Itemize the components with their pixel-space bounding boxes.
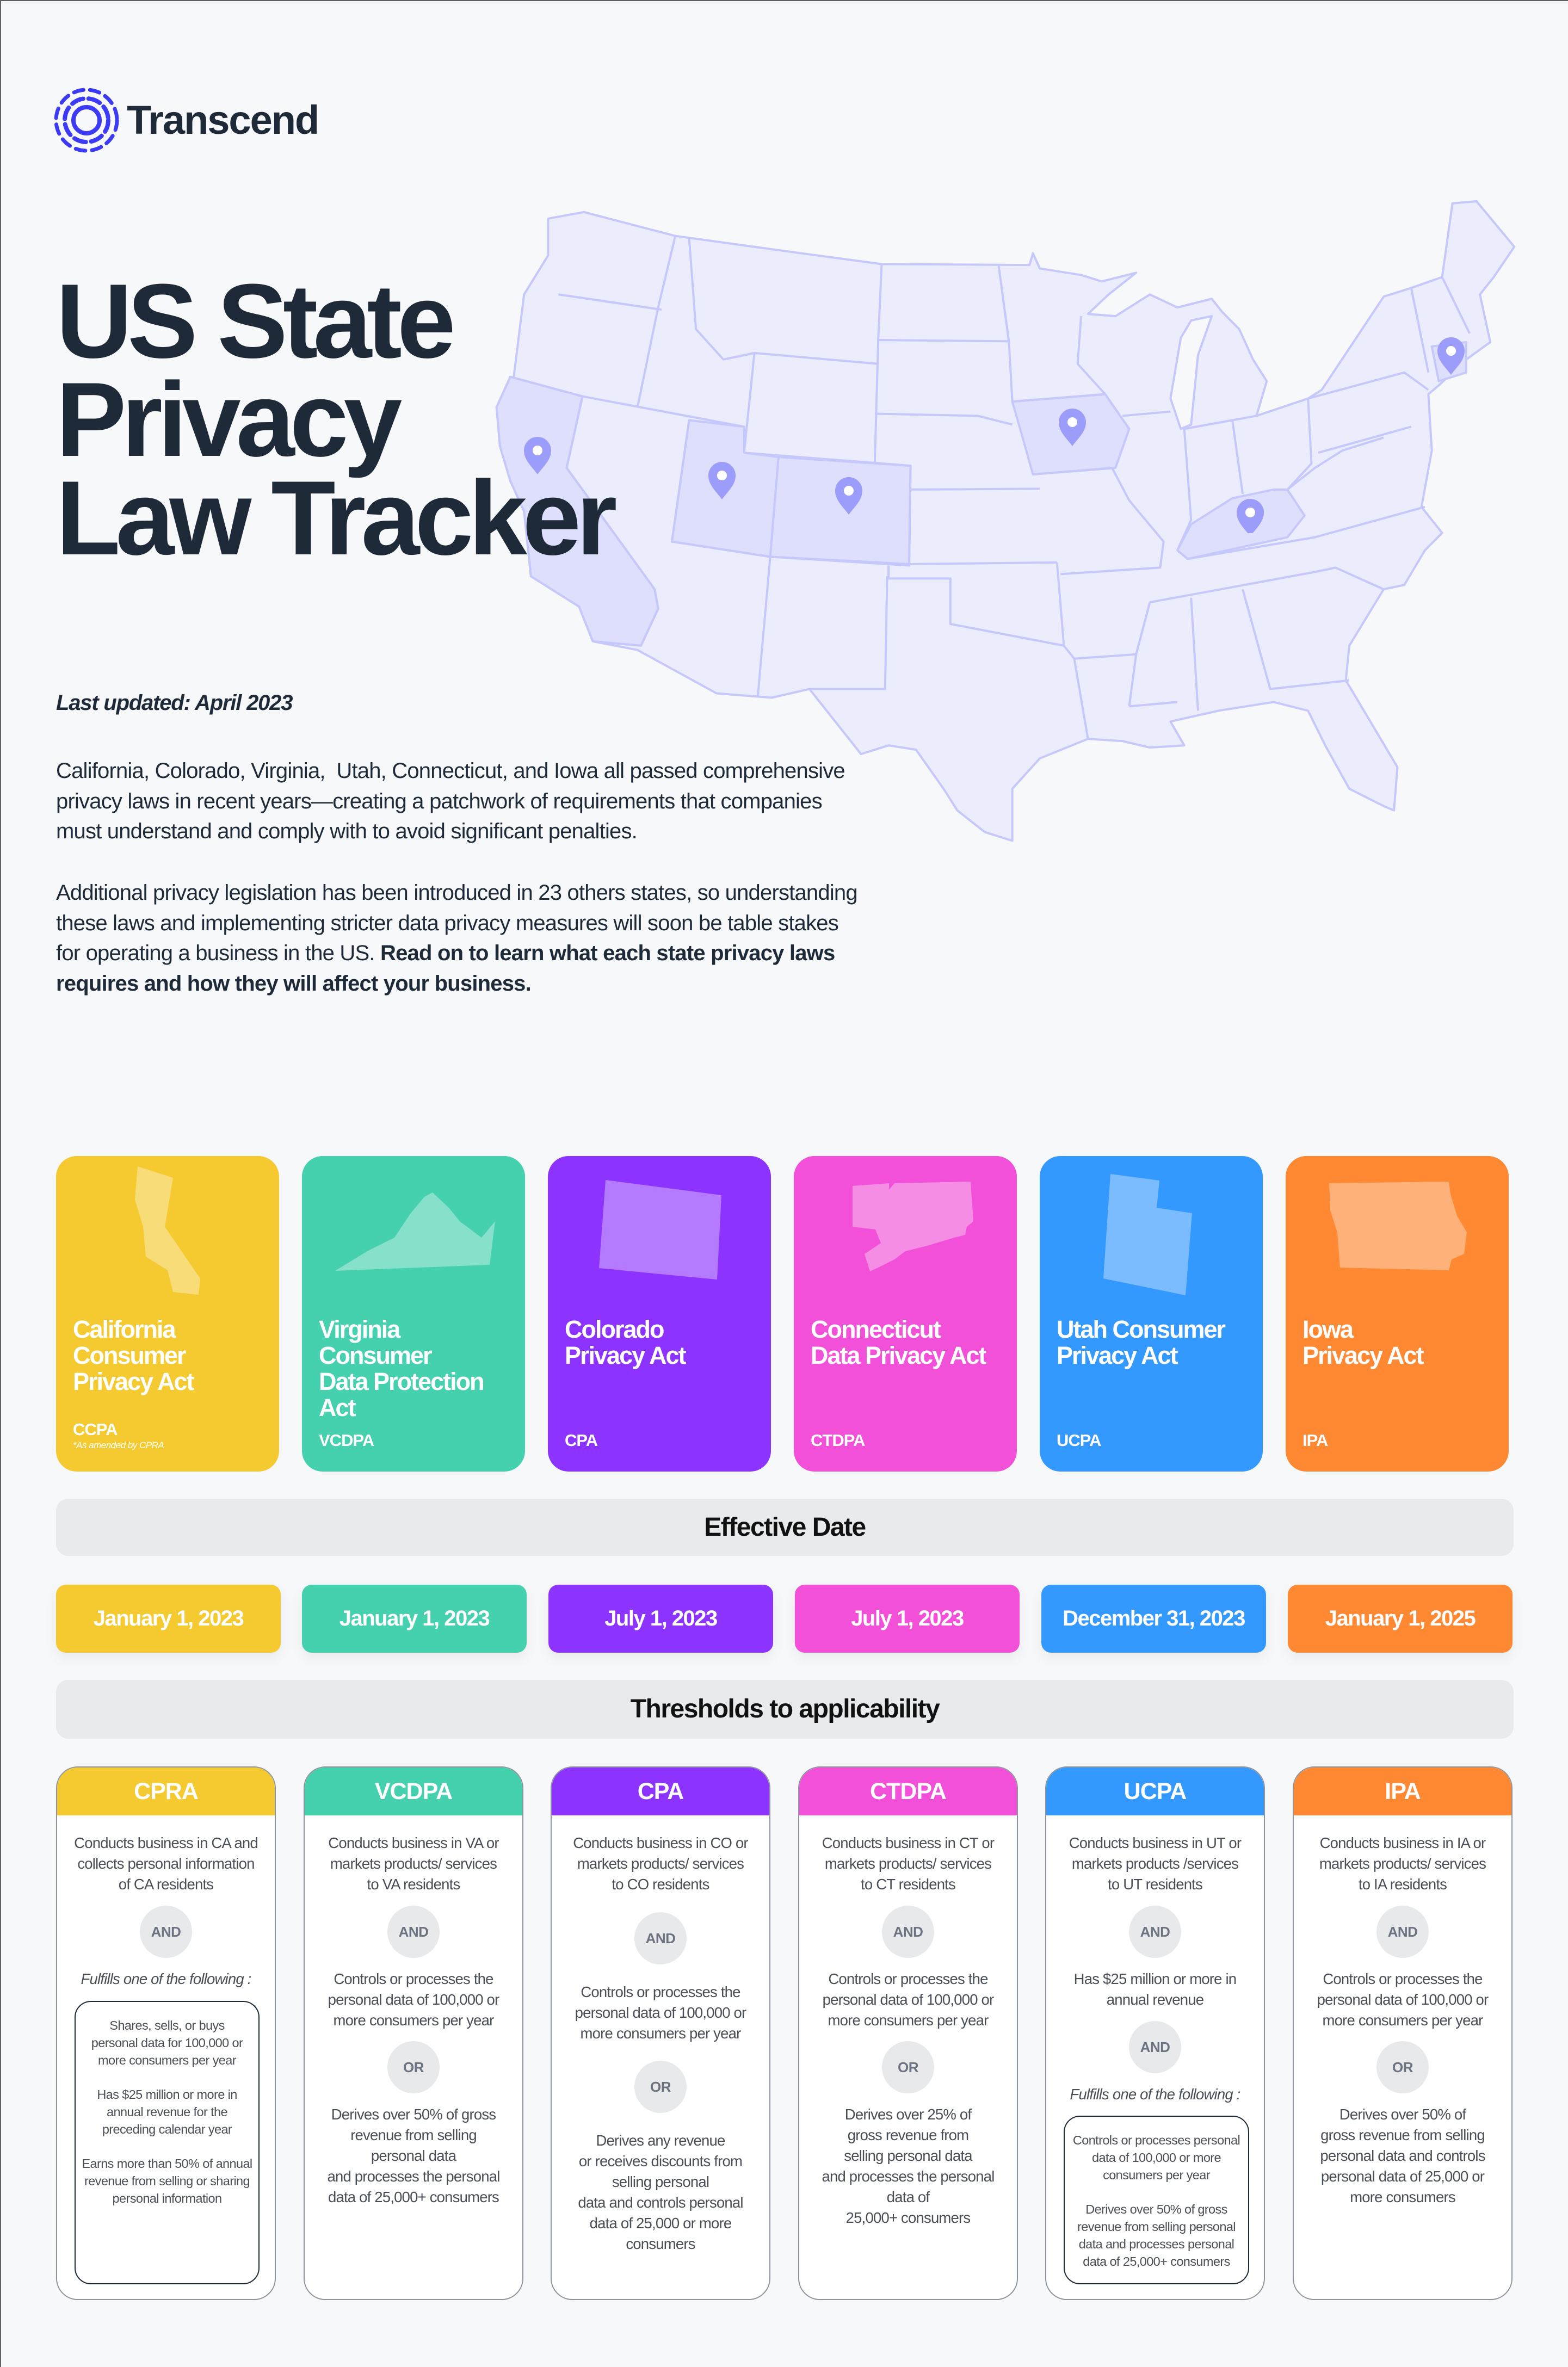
state card: California: CCPA xyxy=(73,1420,118,1439)
threshold card: UCPA: annual revenue xyxy=(1107,1991,1203,2008)
threshold card: IPA: personal data of 100,000 or xyxy=(1317,1991,1488,2008)
threshold card: CPA: more consumers per year xyxy=(581,2025,740,2042)
threshold card: IPA: Conducts business in IA or xyxy=(1320,1834,1485,1851)
threshold card: CTDPA: Derives over 25% of xyxy=(845,2106,971,2123)
threshold card: CPRA: personal information xyxy=(113,2191,221,2205)
threshold card: CTDPA xyxy=(798,1766,1018,2300)
threshold card: CPA: personal data of 100,000 or xyxy=(575,2004,746,2021)
threshold card: VCDPA: more consumers per year xyxy=(334,2012,493,2029)
threshold card: UCPA: Controls or processes personal xyxy=(1073,2133,1240,2147)
icon: map pins xyxy=(524,337,1465,533)
paragraph: additional legislation: Additional privacy legislation has been introduced in 23 others states, so understanding xyxy=(56,881,857,905)
state card: Iowa: IPA xyxy=(1302,1431,1328,1450)
threshold card: IPA: AND xyxy=(1388,1924,1417,1940)
threshold card: CPRA: preceding calendar year xyxy=(102,2122,232,2136)
state card: Utah: UCPA xyxy=(1057,1431,1101,1450)
threshold card: CPA: markets products/ services xyxy=(577,1855,744,1872)
title: Law Tracker xyxy=(56,459,613,577)
threshold card: CPA: Conducts business in CO or xyxy=(573,1834,748,1851)
threshold card: IPA: markets products/ services xyxy=(1319,1855,1486,1872)
threshold card: CPRA: more consumers per year xyxy=(98,2053,236,2067)
threshold card: IPA: Controls or processes the xyxy=(1323,1970,1483,1987)
icon: concentric dashed rings xyxy=(54,88,119,152)
date pill: CTDPA xyxy=(795,1585,1020,1653)
threshold card: UCPA: to UT residents xyxy=(1108,1876,1202,1893)
state card: California: California xyxy=(73,1315,175,1343)
state card: Colorado: Privacy Act xyxy=(565,1342,685,1369)
state card: California xyxy=(56,1156,279,1472)
threshold card: UCPA: data of 100,000 or more xyxy=(1092,2150,1221,2165)
last updated: Last updated: April 2023 xyxy=(56,691,292,715)
heading: Effective Date xyxy=(56,1499,1514,1556)
threshold card: CPA: data of 25,000 or more xyxy=(590,2215,731,2232)
state card: California: *As amended by CPRA xyxy=(73,1440,164,1450)
threshold card: UCPA: Fulfills one of the following : xyxy=(1070,2086,1240,2103)
paragraph: intro: must understand and comply with to avoid significant penalties. xyxy=(56,819,637,843)
date pill: CCPA xyxy=(56,1585,281,1653)
threshold card: UCPA: Conducts business in UT or xyxy=(1069,1834,1241,1851)
threshold card: IPA: IPA xyxy=(1385,1778,1421,1804)
state card: Virginia: Act xyxy=(319,1394,355,1422)
threshold card: IPA xyxy=(1293,1766,1513,2300)
threshold card: CPA: Controls or processes the xyxy=(581,1983,740,2000)
threshold card: CTDPA: to CT residents xyxy=(861,1876,955,1893)
threshold card: CPRA: Has $25 million or more in xyxy=(97,2087,237,2102)
threshold card: UCPA: AND xyxy=(1140,1924,1170,1940)
threshold card: VCDPA: data of 25,000+ consumers xyxy=(328,2189,499,2205)
threshold card: VCDPA xyxy=(304,1766,523,2300)
state card: Virginia: Data Protection xyxy=(319,1368,484,1395)
date pill: UCPA: December 31, 2023 xyxy=(1063,1606,1245,1630)
threshold card: UCPA: Has $25 million or more in xyxy=(1074,1970,1236,1987)
state card: Colorado: Colorado xyxy=(565,1315,664,1343)
threshold card: CPRA xyxy=(56,1766,276,2300)
paragraph: intro: California, Colorado, Virginia, Utah, Connecticut, and Iowa all passed comprehensive xyxy=(56,759,845,783)
title: Privacy xyxy=(56,361,397,479)
state card: California: Privacy Act xyxy=(73,1368,193,1395)
threshold card: CTDPA: AND xyxy=(893,1924,923,1940)
threshold card: CTDPA: selling personal data xyxy=(844,2147,972,2164)
state card: Iowa xyxy=(1286,1156,1509,1472)
threshold card: UCPA: consumers per year xyxy=(1103,2168,1210,2182)
title xyxy=(56,262,616,577)
threshold card: VCDPA: markets products/ services xyxy=(330,1855,497,1872)
date pill: CPA: July 1, 2023 xyxy=(604,1606,717,1630)
threshold card: CPA: Derives any revenue xyxy=(596,2132,725,2149)
threshold card: UCPA: Derives over 50% of gross xyxy=(1085,2202,1227,2216)
date pill: IPA: January 1, 2025 xyxy=(1325,1606,1475,1630)
threshold card: CPRA: Conducts business in CA and xyxy=(74,1834,258,1851)
date pill: VCDPA xyxy=(302,1585,527,1653)
threshold card: CTDPA: and processes the personal xyxy=(822,2168,995,2185)
threshold card: CTDPA: Controls or processes the xyxy=(828,1970,988,1987)
threshold card: CPRA: Earns more than 50% of annual xyxy=(82,2156,252,2171)
state card: California: Consumer xyxy=(73,1342,186,1369)
threshold card: VCDPA: Conducts business in VA or xyxy=(328,1834,499,1851)
threshold card: CPRA: annual revenue for the xyxy=(107,2105,227,2119)
threshold card: VCDPA: Controls or processes the xyxy=(334,1970,493,1987)
threshold card: UCPA: UCPA xyxy=(1124,1778,1186,1804)
threshold card: CPA: data and controls personal xyxy=(578,2194,743,2211)
threshold card: CTDPA: gross revenue from xyxy=(848,2127,968,2143)
threshold card: UCPA: AND xyxy=(1140,2039,1170,2055)
threshold card: UCPA: markets products /services xyxy=(1072,1855,1238,1872)
threshold card: CPRA: Shares, sells, or buys xyxy=(109,2018,225,2032)
threshold card: CTDPA: personal data of 100,000 or xyxy=(823,1991,993,2008)
threshold card: CPA xyxy=(551,1766,770,2300)
map of US states xyxy=(495,200,1516,842)
state card: Utah: Utah Consumer xyxy=(1057,1315,1225,1343)
threshold card: CTDPA: 25,000+ consumers xyxy=(846,2209,970,2226)
date pill: VCDPA: January 1, 2023 xyxy=(339,1606,489,1630)
threshold card: CPRA: of CA residents xyxy=(119,1876,213,1893)
threshold card: VCDPA: AND xyxy=(399,1924,428,1940)
threshold card: CPRA: AND xyxy=(151,1924,181,1940)
threshold card: IPA: OR xyxy=(1392,2059,1413,2075)
paragraph: intro xyxy=(56,759,845,843)
threshold card: CPA: or receives discounts from xyxy=(579,2153,742,2170)
threshold card: IPA: more consumers xyxy=(1350,2189,1455,2205)
threshold card: UCPA: revenue from selling personal xyxy=(1077,2220,1236,2234)
threshold card: CPA: AND xyxy=(646,1930,675,1946)
state card: Virginia xyxy=(302,1156,525,1472)
threshold card: VCDPA: OR xyxy=(403,2059,424,2075)
date pill: IPA xyxy=(1288,1585,1513,1653)
threshold card: VCDPA: VCDPA xyxy=(375,1778,452,1804)
state card: Utah: Privacy Act xyxy=(1057,1342,1177,1369)
paragraph: intro: privacy laws in recent years—creating a patchwork of requirements that companies xyxy=(56,789,822,813)
heading: Thresholds to applicability xyxy=(56,1680,1514,1739)
paragraph: additional legislation xyxy=(56,881,857,996)
title: US State xyxy=(56,262,451,380)
threshold card: IPA: Derives over 50% of xyxy=(1339,2106,1466,2123)
threshold card: CPRA: revenue from selling or sharing xyxy=(84,2174,250,2188)
date pill: CTDPA: July 1, 2023 xyxy=(851,1606,964,1630)
state card: Virginia: Consumer xyxy=(319,1342,431,1369)
threshold card: UCPA: data of 25,000+ consumers xyxy=(1083,2254,1230,2269)
state card: Virginia: Virginia xyxy=(319,1315,399,1343)
threshold card: CPRA: personal data for 100,000 or xyxy=(91,2036,243,2050)
state card: Virginia: VCDPA xyxy=(319,1431,374,1450)
threshold card: CPA: selling personal xyxy=(612,2173,709,2190)
state card: Iowa: Privacy Act xyxy=(1302,1342,1423,1369)
paragraph: additional legislation: requires and how they will affect your business. xyxy=(56,972,531,996)
threshold card: VCDPA: revenue from selling xyxy=(350,2127,477,2143)
threshold card: CTDPA: more consumers per year xyxy=(828,2012,988,2029)
threshold card: CPA: CPA xyxy=(638,1778,683,1804)
threshold card: CPRA: Fulfills one of the following : xyxy=(81,1970,251,1987)
state card: Iowa: Iowa xyxy=(1302,1315,1353,1343)
threshold card: IPA: personal data and controls xyxy=(1320,2147,1485,2164)
threshold card: CTDPA: markets products/ services xyxy=(825,1855,991,1872)
threshold card: CPRA: collects personal information xyxy=(77,1855,255,1872)
threshold card: CPA: OR xyxy=(650,2079,671,2095)
paragraph: additional legislation: these laws and implementing stricter data privacy measures will soon be table stakes xyxy=(56,911,838,935)
threshold card: CTDPA: Conducts business in CT or xyxy=(822,1834,994,1851)
logo wordmark: Transcend xyxy=(127,97,318,143)
threshold card: CPA: consumers xyxy=(626,2235,695,2252)
heading: Effective Date: Effective Date xyxy=(704,1513,866,1542)
threshold card: IPA: more consumers per year xyxy=(1323,2012,1483,2029)
state card: Utah xyxy=(1040,1156,1263,1472)
threshold card: CTDPA: CTDPA xyxy=(870,1778,946,1804)
threshold card: VCDPA: to VA residents xyxy=(367,1876,460,1893)
state card: Connecticut: Connecticut xyxy=(811,1315,940,1343)
date pill: CPA xyxy=(548,1585,773,1653)
state card: Connecticut: CTDPA xyxy=(811,1431,865,1450)
state card: Colorado xyxy=(548,1156,771,1472)
state card: Connecticut xyxy=(794,1156,1017,1472)
threshold card: UCPA: data and processes personal xyxy=(1079,2237,1234,2251)
heading: Thresholds to applicability: Thresholds to applicability xyxy=(631,1695,939,1723)
threshold card: CPA: to CO residents xyxy=(612,1876,709,1893)
logo: Transcend xyxy=(54,88,318,152)
threshold card: VCDPA: personal data xyxy=(371,2147,456,2164)
threshold card: UCPA xyxy=(1045,1766,1265,2300)
threshold card: CPRA: CPRA xyxy=(134,1778,198,1804)
state card: Colorado: CPA xyxy=(565,1431,597,1450)
threshold card: CTDPA: data of xyxy=(887,2189,929,2205)
date pill: CCPA: January 1, 2023 xyxy=(94,1606,243,1630)
threshold card: IPA: personal data of 25,000 or xyxy=(1321,2168,1484,2185)
threshold card: VCDPA: Derives over 50% of gross xyxy=(331,2106,496,2123)
threshold card: CTDPA: OR xyxy=(898,2059,918,2075)
threshold card: IPA: to IA residents xyxy=(1359,1876,1447,1893)
threshold card: VCDPA: and processes the personal xyxy=(327,2168,500,2185)
threshold card: VCDPA: personal data of 100,000 or xyxy=(328,1991,499,2008)
state card: Connecticut: Data Privacy Act xyxy=(811,1342,986,1369)
paragraph: additional legislation: for operating a business in the US. Read on to learn what each state privacy laws xyxy=(56,941,835,965)
threshold card: IPA: gross revenue from selling xyxy=(1320,2127,1485,2143)
date pill: UCPA xyxy=(1041,1585,1266,1653)
